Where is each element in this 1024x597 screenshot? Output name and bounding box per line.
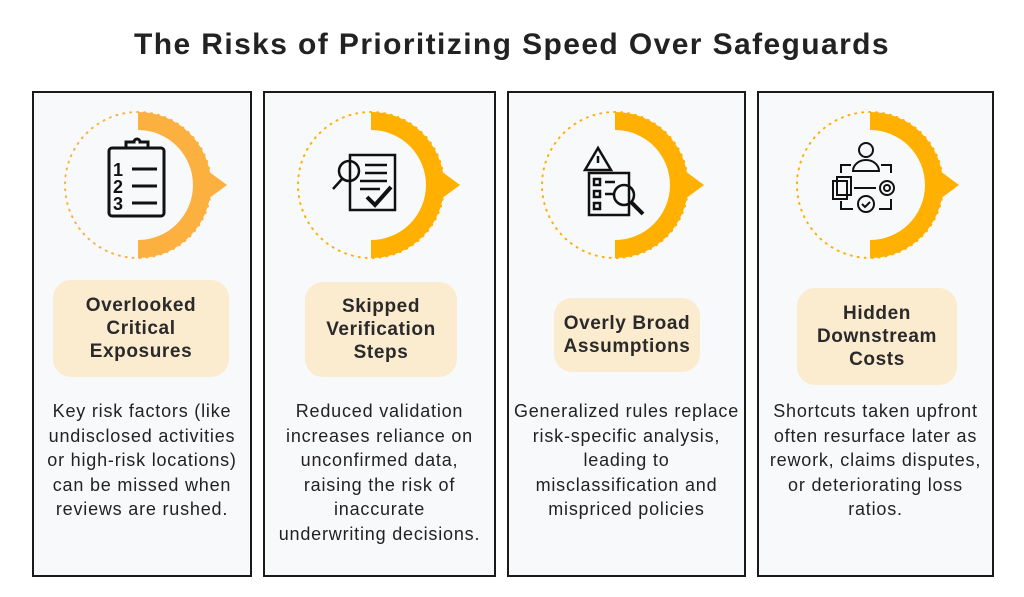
description [279,401,480,544]
description: inaccurate [334,499,425,519]
description: Key risk factors (like [53,401,231,421]
label: Skipped [342,296,420,317]
icon: arc with document and magnifier [297,111,460,259]
description [47,401,237,519]
description: raising the risk of [304,474,455,494]
label [305,282,457,377]
icon: arc with clipboard: 2 [113,177,123,197]
description: can be missed when [53,474,231,494]
label [53,280,229,377]
panel: hidden downstream costs [757,91,994,577]
description: Reduced validation [296,401,463,421]
label [797,288,957,385]
icon: arc with clipboard [64,111,227,259]
panel: skipped verification steps [263,91,496,577]
description: undisclosed activities [49,426,235,446]
icon: arc with workflow [796,111,959,259]
description: rework, claims disputes, [770,450,981,470]
description: reviews are rushed. [56,499,228,519]
label: Steps [354,342,408,363]
description: Shortcuts taken upfront [773,401,978,421]
label: Overly Broad [564,313,690,334]
label: Overlooked [86,295,196,316]
description: leading to [583,450,670,470]
label: Downstream [817,326,937,347]
icon: arc with clipboard: 3 [113,194,123,214]
icon: arc with warning checklist [541,111,704,259]
description: Generalized rules replace [514,401,739,421]
label: Costs [849,349,905,370]
panel: overlooked critical exposures [32,91,252,577]
description: ratios. [848,499,903,519]
description: increases reliance on [286,426,473,446]
icon: arc with clipboard: 1 [113,160,123,180]
description: mispriced policies [548,499,705,519]
description: misclassification and [536,474,717,494]
label: Exposures [90,341,192,362]
description: risk-specific analysis, [533,426,720,446]
panel: overly broad assumptions [507,91,746,577]
description: underwriting decisions. [279,524,480,544]
description [514,401,739,519]
title: The Risks of Prioritizing Speed Over Safeguards [134,28,890,61]
label: Verification [326,319,436,340]
label: Critical [106,318,176,339]
label: Assumptions [564,336,690,357]
description: unconfirmed data, [301,450,458,470]
description: often resurface later as [774,426,977,446]
label: Hidden [843,303,911,324]
description [770,401,981,519]
description: or deteriorating loss [788,474,963,494]
description: or high-risk locations) [47,450,237,470]
label [554,298,700,372]
